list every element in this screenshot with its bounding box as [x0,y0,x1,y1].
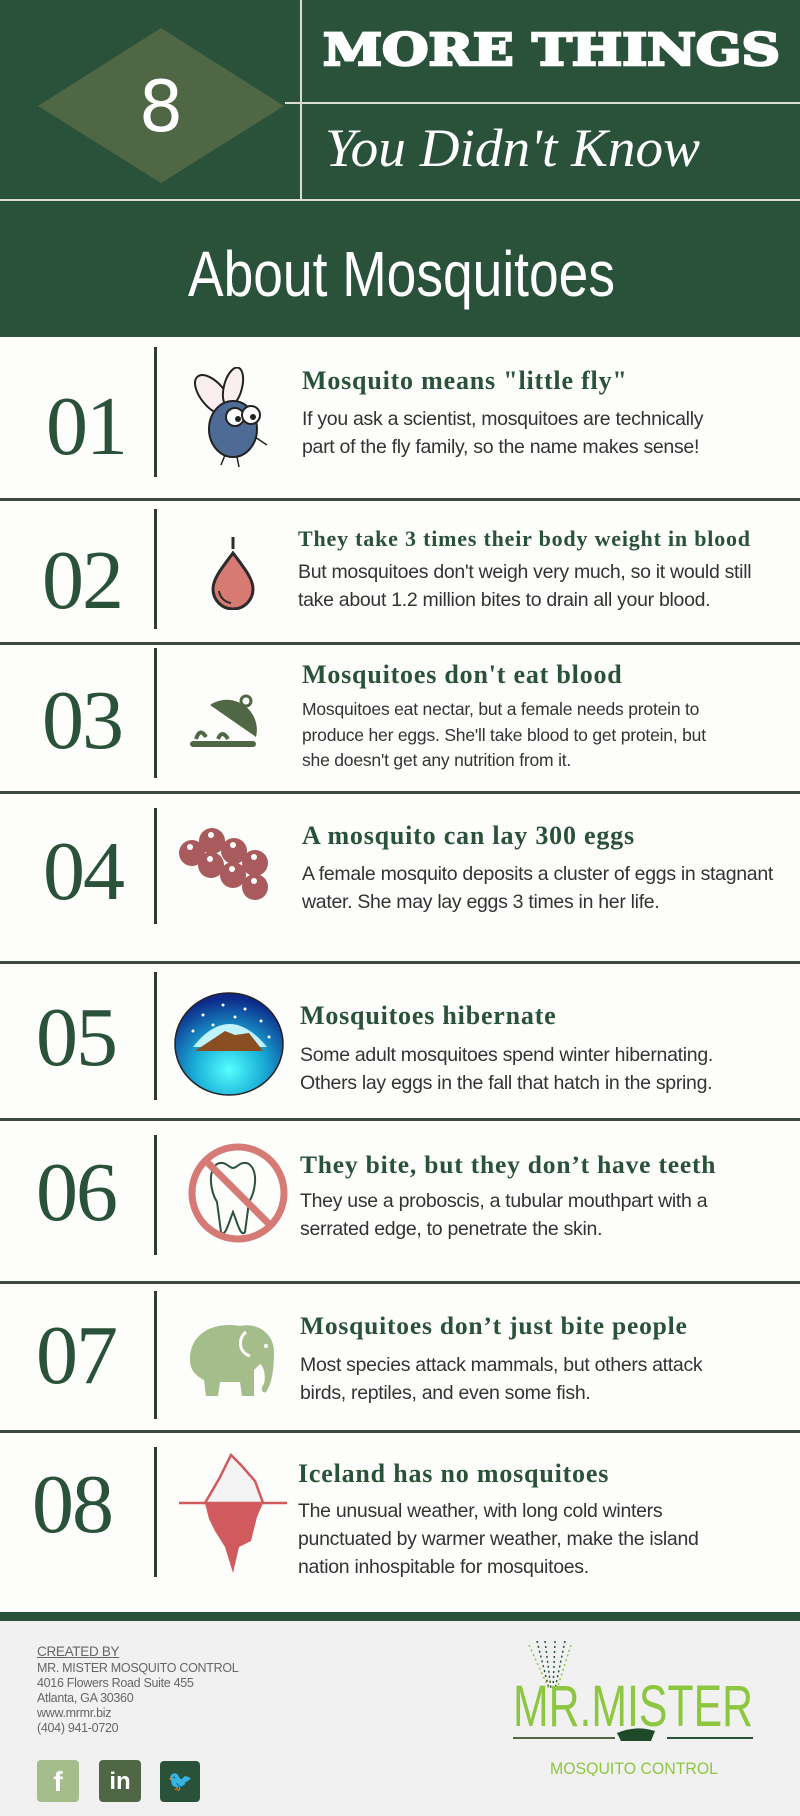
creator info [37,1644,238,1735]
icon: facebook [37,1760,79,1802]
row 07: Mosquitoes don’t just bite people [300,1311,688,1340]
row 01: part of the fly family, so the name makes sense! [302,436,699,458]
icon: eggs [179,828,268,900]
icon: linkedin [99,1760,141,1802]
row 03: she doesn't get any nutrition from it. [302,750,571,770]
row 04: 04 [43,825,123,918]
social icons [37,1760,200,1802]
title line 1: MORE THINGS [323,25,780,76]
row 03 [42,648,706,778]
icon: twitter [160,1761,200,1802]
row 01: If you ask a scientist, mosquitoes are technically [302,408,703,430]
row 07: 07 [36,1309,116,1402]
row 01: 01 [46,380,126,473]
row 08 [32,1447,699,1578]
creator info: Atlanta, GA 30360 [37,1691,133,1705]
row 07: Most species attack mammals, but others attack [300,1354,702,1376]
title line 3: About Mosquitoes [188,238,615,310]
creator info: 4016 Flowers Road Suite 455 [37,1676,194,1690]
row 03: Mosquitoes eat nectar, but a female needs protein to [302,699,699,719]
header [0,0,800,337]
row 08: Iceland has no mosquitoes [298,1459,609,1488]
creator info: MR. MISTER MOSQUITO CONTROL [37,1661,238,1675]
row 05: Some adult mosquitoes spend winter hibernating. [300,1044,713,1066]
row 01: Mosquito means "little fly" [302,366,628,395]
row 08: punctuated by warmer weather, make the island [298,1528,699,1550]
row 07: birds, reptiles, and even some fish. [300,1382,591,1404]
diamond badge [38,28,284,183]
icon: linkedin: in [109,1768,131,1795]
row 05: 05 [36,991,116,1084]
diamond badge: 8 [139,66,183,148]
row 02: But mosquitoes don't weigh very much, so it would still [298,561,751,583]
row 02: take about 1.2 million bites to drain all your blood. [298,589,710,611]
row 08: nation inhospitable for mosquitoes. [298,1556,589,1578]
row 03: produce her eggs. She'll take blood to get protein, but [302,724,706,744]
icon: twitter: 🐦 [168,1769,192,1793]
title line 2: You Didn't Know [325,118,700,178]
row 05: Mosquitoes hibernate [300,1001,556,1030]
row 05 [36,972,713,1100]
row 06 [36,1135,716,1255]
icon: blood drop [212,537,254,610]
row 02 [42,509,751,629]
row 02: They take 3 times their body weight in blood [298,526,751,551]
row 04: A mosquito can lay 300 eggs [302,821,635,850]
row 02: 02 [42,534,122,627]
icon: fly [194,367,268,467]
row 07 [36,1291,703,1419]
row 03: 03 [42,674,122,767]
row 04: A female mosquito deposits a cluster of eggs in stagnant [302,863,773,885]
creator info: CREATED BY [37,1644,119,1659]
row 05: Others lay eggs in the fall that hatch in the spring. [300,1072,712,1094]
row 08: The unusual weather, with long cold winters [298,1500,662,1522]
creator info: www.mrmr.biz [37,1706,111,1720]
creator info: (404) 941-0720 [37,1721,118,1735]
icon: hibernation [174,992,284,1096]
row 06: 06 [36,1146,116,1239]
row 06: They bite, but they don’t have teeth [300,1150,716,1179]
icon: elephant [190,1325,274,1396]
row 04: water. She may lay eggs 3 times in her life. [302,891,659,913]
row 04 [43,808,774,924]
row 03: Mosquitoes don't eat blood [302,660,623,689]
row 06: serrated edge, to penetrate the skin. [300,1218,602,1240]
row 06: They use a proboscis, a tubular mouthpart with a [300,1190,707,1212]
logo [513,1641,753,1776]
icon: iceberg [179,1453,287,1573]
icon: facebook: f [53,1766,63,1797]
row 01 [46,347,704,477]
icon: cloche [190,694,257,747]
footer [0,1612,800,1816]
icon: no teeth [188,1144,288,1242]
row 08: 08 [32,1458,112,1551]
